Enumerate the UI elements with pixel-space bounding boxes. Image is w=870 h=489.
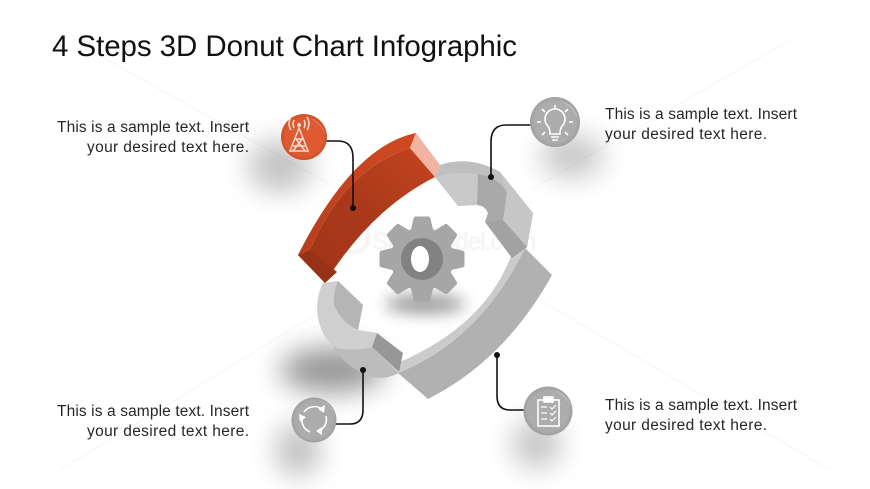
text block: top right xyxy=(605,106,798,143)
watermark: SlideModel.com xyxy=(372,228,537,256)
text block: bottom right xyxy=(605,397,798,434)
icon: tower on red circle xyxy=(281,114,327,160)
gear xyxy=(382,219,462,299)
icon: clipboard on gray circle xyxy=(524,386,572,436)
connector: red icon to red segment xyxy=(325,141,356,211)
text block: top left xyxy=(57,119,250,156)
text block: top left: This is a sample text. Insert xyxy=(57,119,250,136)
connector: cycle icon to bottom left segment xyxy=(336,367,366,424)
icon: light bulb on gray circle xyxy=(530,97,580,147)
donut segment: bottom left gray xyxy=(317,281,403,378)
title: 4 Steps 3D Donut Chart Infographic xyxy=(52,30,517,63)
text block: top left: your desired text here. xyxy=(87,139,249,156)
icon: cycle arrows on gray circle xyxy=(292,398,336,442)
text block: bottom right: your desired text here. xyxy=(605,417,767,434)
text block: bottom left: your desired text here. xyxy=(87,423,249,440)
text block: top right: This is a sample text. Insert xyxy=(605,106,798,123)
connector: bulb icon to top right segment xyxy=(488,125,531,180)
text block: bottom right: This is a sample text. Insert xyxy=(605,397,798,414)
donut segment: red highlighted xyxy=(298,133,440,283)
connector: clipboard icon to bottom right segment xyxy=(494,352,524,410)
text block: bottom left: This is a sample text. Insert xyxy=(57,403,250,420)
donut segment: bottom right gray xyxy=(398,248,552,399)
donut segment: top right gray xyxy=(435,161,533,258)
text block: bottom left xyxy=(57,403,250,440)
faint background lines xyxy=(60,40,830,470)
soft shadows xyxy=(248,134,604,476)
text block: top right: your desired text here. xyxy=(605,126,767,143)
